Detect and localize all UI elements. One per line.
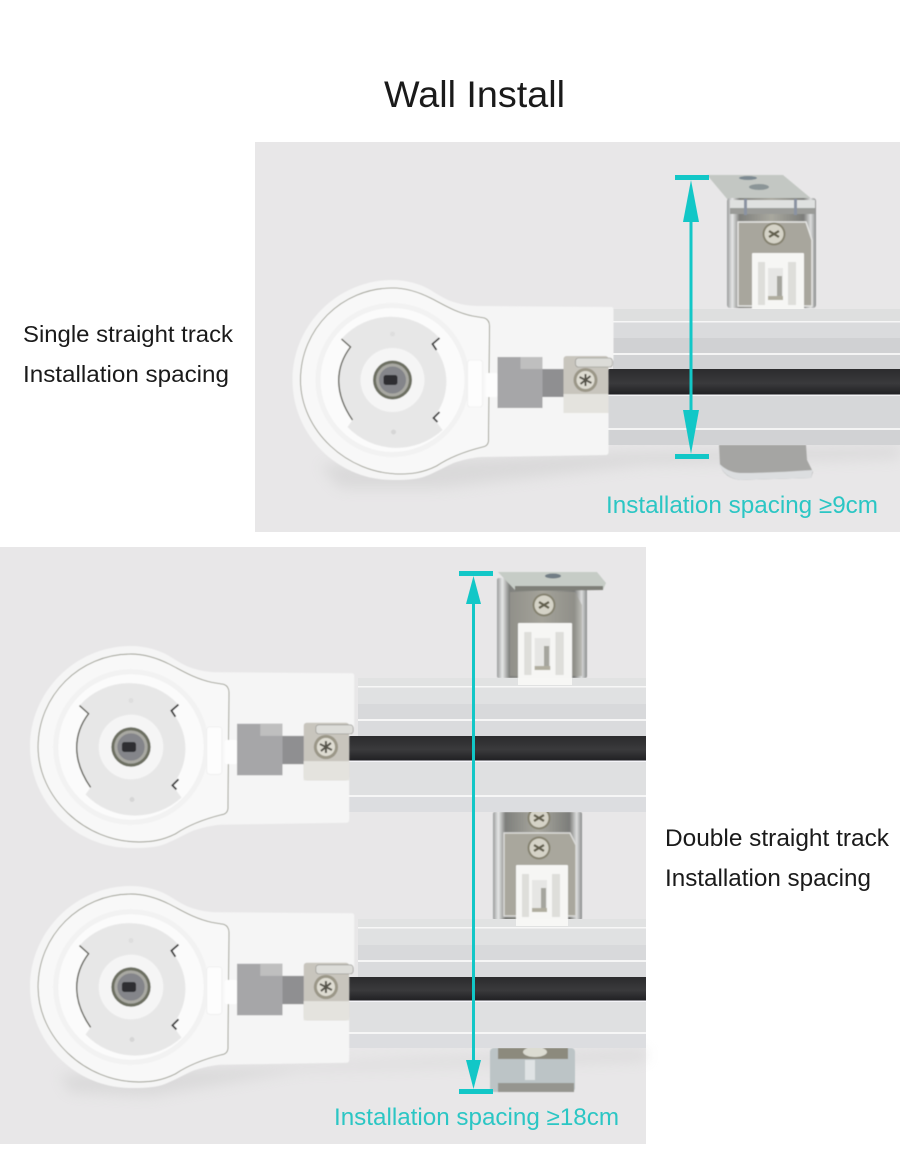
text block: double track label: Double straight track bbox=[665, 825, 890, 852]
text block: double track label bbox=[665, 825, 890, 892]
text block: double track label: Installation spacing bbox=[665, 865, 871, 892]
spacing label: 18cm: Installation spacing ≥18cm bbox=[334, 1104, 619, 1131]
motor head: lower bbox=[30, 886, 354, 1088]
motor head: upper bbox=[30, 646, 354, 848]
single track rail bbox=[605, 309, 900, 445]
text block: single track label: Single straight track bbox=[23, 321, 234, 347]
motor head: single track bbox=[292, 280, 614, 480]
wall bracket: middle bbox=[493, 806, 582, 927]
wall bracket: bottom bbox=[718, 445, 813, 480]
clip fronts over upper and lower rail bbox=[516, 678, 572, 926]
double track rail: upper bbox=[348, 678, 646, 812]
panel: double track photo bbox=[0, 547, 646, 1144]
spacing label: 9cm: Installation spacing ≥9cm bbox=[606, 492, 878, 519]
dimension arrow: 9cm bbox=[675, 175, 709, 459]
wall bracket: lower bbox=[490, 1047, 575, 1092]
panel: single track photo bbox=[255, 142, 900, 532]
double track rail: lower bbox=[348, 919, 646, 1048]
text block: single track label: Installation spacing bbox=[23, 361, 229, 387]
wall bracket: upper bbox=[497, 572, 606, 685]
dimension arrow: 18cm bbox=[459, 571, 493, 1094]
text block: single track label bbox=[23, 321, 234, 387]
title: Wall Install bbox=[384, 74, 565, 115]
wall bracket: top bbox=[707, 175, 816, 315]
